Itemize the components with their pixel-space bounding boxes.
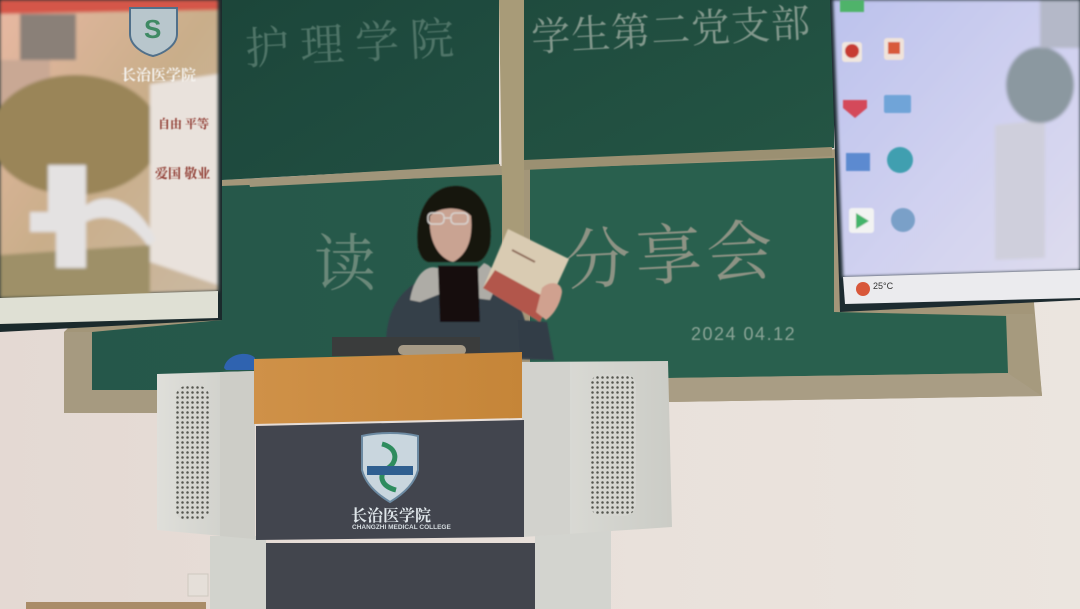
slide: values line one: 自由 平等 xyxy=(158,115,209,132)
base left xyxy=(210,536,266,609)
desktop icons xyxy=(840,0,915,233)
weather icon xyxy=(856,282,870,296)
chalkboard xyxy=(64,0,1042,413)
taskbar xyxy=(843,270,1080,304)
book cover xyxy=(483,229,569,322)
chalk: 读: 读 xyxy=(314,214,376,303)
slide: building xyxy=(20,14,76,60)
lectern xyxy=(157,352,672,609)
panel: upper right board xyxy=(524,0,834,162)
wallpaper: tree xyxy=(1006,47,1074,123)
speaker: woman holding a book xyxy=(386,186,569,360)
sleeve xyxy=(518,320,554,360)
left projector screen xyxy=(0,0,222,332)
right panel fold xyxy=(522,362,570,537)
slide: white banner wall xyxy=(150,74,218,285)
wallpaper base xyxy=(833,0,1080,277)
wallpaper: high rise xyxy=(1040,0,1080,48)
hand xyxy=(536,283,562,320)
jacket body xyxy=(386,268,554,360)
rail: right vertical frame xyxy=(1006,314,1042,396)
chalk: 分享会: 分享会 xyxy=(562,197,780,303)
glasses case xyxy=(398,345,466,355)
shield banner xyxy=(367,466,413,475)
rail: centre vertical xyxy=(499,0,524,250)
floor skirting xyxy=(26,602,206,609)
board frame xyxy=(64,140,1042,413)
panel: lower left board xyxy=(92,175,502,390)
face xyxy=(430,208,471,262)
slide base xyxy=(0,0,218,298)
black inner top xyxy=(438,266,480,322)
speaker grille right xyxy=(590,374,636,516)
right speaker panel xyxy=(522,361,672,537)
chalk heading: 护理学院: 护理学院 xyxy=(243,2,466,77)
screen frame xyxy=(0,0,222,332)
wall socket xyxy=(188,574,208,596)
college Chinese name: 长治医学院 xyxy=(351,503,431,526)
panel: lower right board xyxy=(530,158,1008,378)
book xyxy=(483,229,569,322)
slide: red sky xyxy=(0,0,218,14)
left speaker panel xyxy=(157,371,255,539)
blue object xyxy=(224,354,255,370)
slide: taskbar xyxy=(0,291,218,324)
rail: right horizontal xyxy=(524,147,832,170)
base front panel xyxy=(266,543,535,609)
book red band xyxy=(483,270,550,322)
desktop wallpaper xyxy=(833,0,1080,277)
college English name: CHANGZHI MEDICAL COLLEGE xyxy=(352,524,451,531)
chalk date: 2024 04.12 xyxy=(691,324,796,344)
panel: upper left board xyxy=(222,0,499,180)
weather temperature: 25°C xyxy=(873,281,894,291)
glasses xyxy=(428,213,468,224)
hair xyxy=(417,186,491,262)
rail: bottom frame xyxy=(668,373,1042,402)
slide: trees xyxy=(0,75,160,195)
laptop xyxy=(332,337,480,356)
chalk title: 读书分享会 xyxy=(314,197,780,303)
right projector screen xyxy=(830,0,1080,312)
slide photo xyxy=(0,0,218,298)
left panel fold xyxy=(220,371,255,539)
slide: college name: 长治医学院 xyxy=(121,64,196,85)
wallpaper: building xyxy=(995,120,1045,260)
screen frame xyxy=(830,0,1080,312)
wooden top xyxy=(254,352,522,424)
hoodie collar xyxy=(410,263,495,302)
slide: logo shield xyxy=(130,8,177,56)
slide: low building xyxy=(0,60,50,110)
laptop and glasses on lectern xyxy=(224,337,480,370)
book title xyxy=(512,250,535,262)
speaker grille left xyxy=(176,386,209,520)
slide: logo green helix: S xyxy=(144,14,161,44)
slide: values line two: 爱国 敬业 xyxy=(154,163,210,182)
slide: campus gate xyxy=(30,165,156,268)
rail: bottom left frame xyxy=(64,332,160,413)
college shield logo xyxy=(362,433,418,502)
base right xyxy=(535,530,611,609)
rail: left horizontal xyxy=(248,164,502,187)
front dark panel xyxy=(256,420,524,540)
slide: ground xyxy=(0,245,150,298)
